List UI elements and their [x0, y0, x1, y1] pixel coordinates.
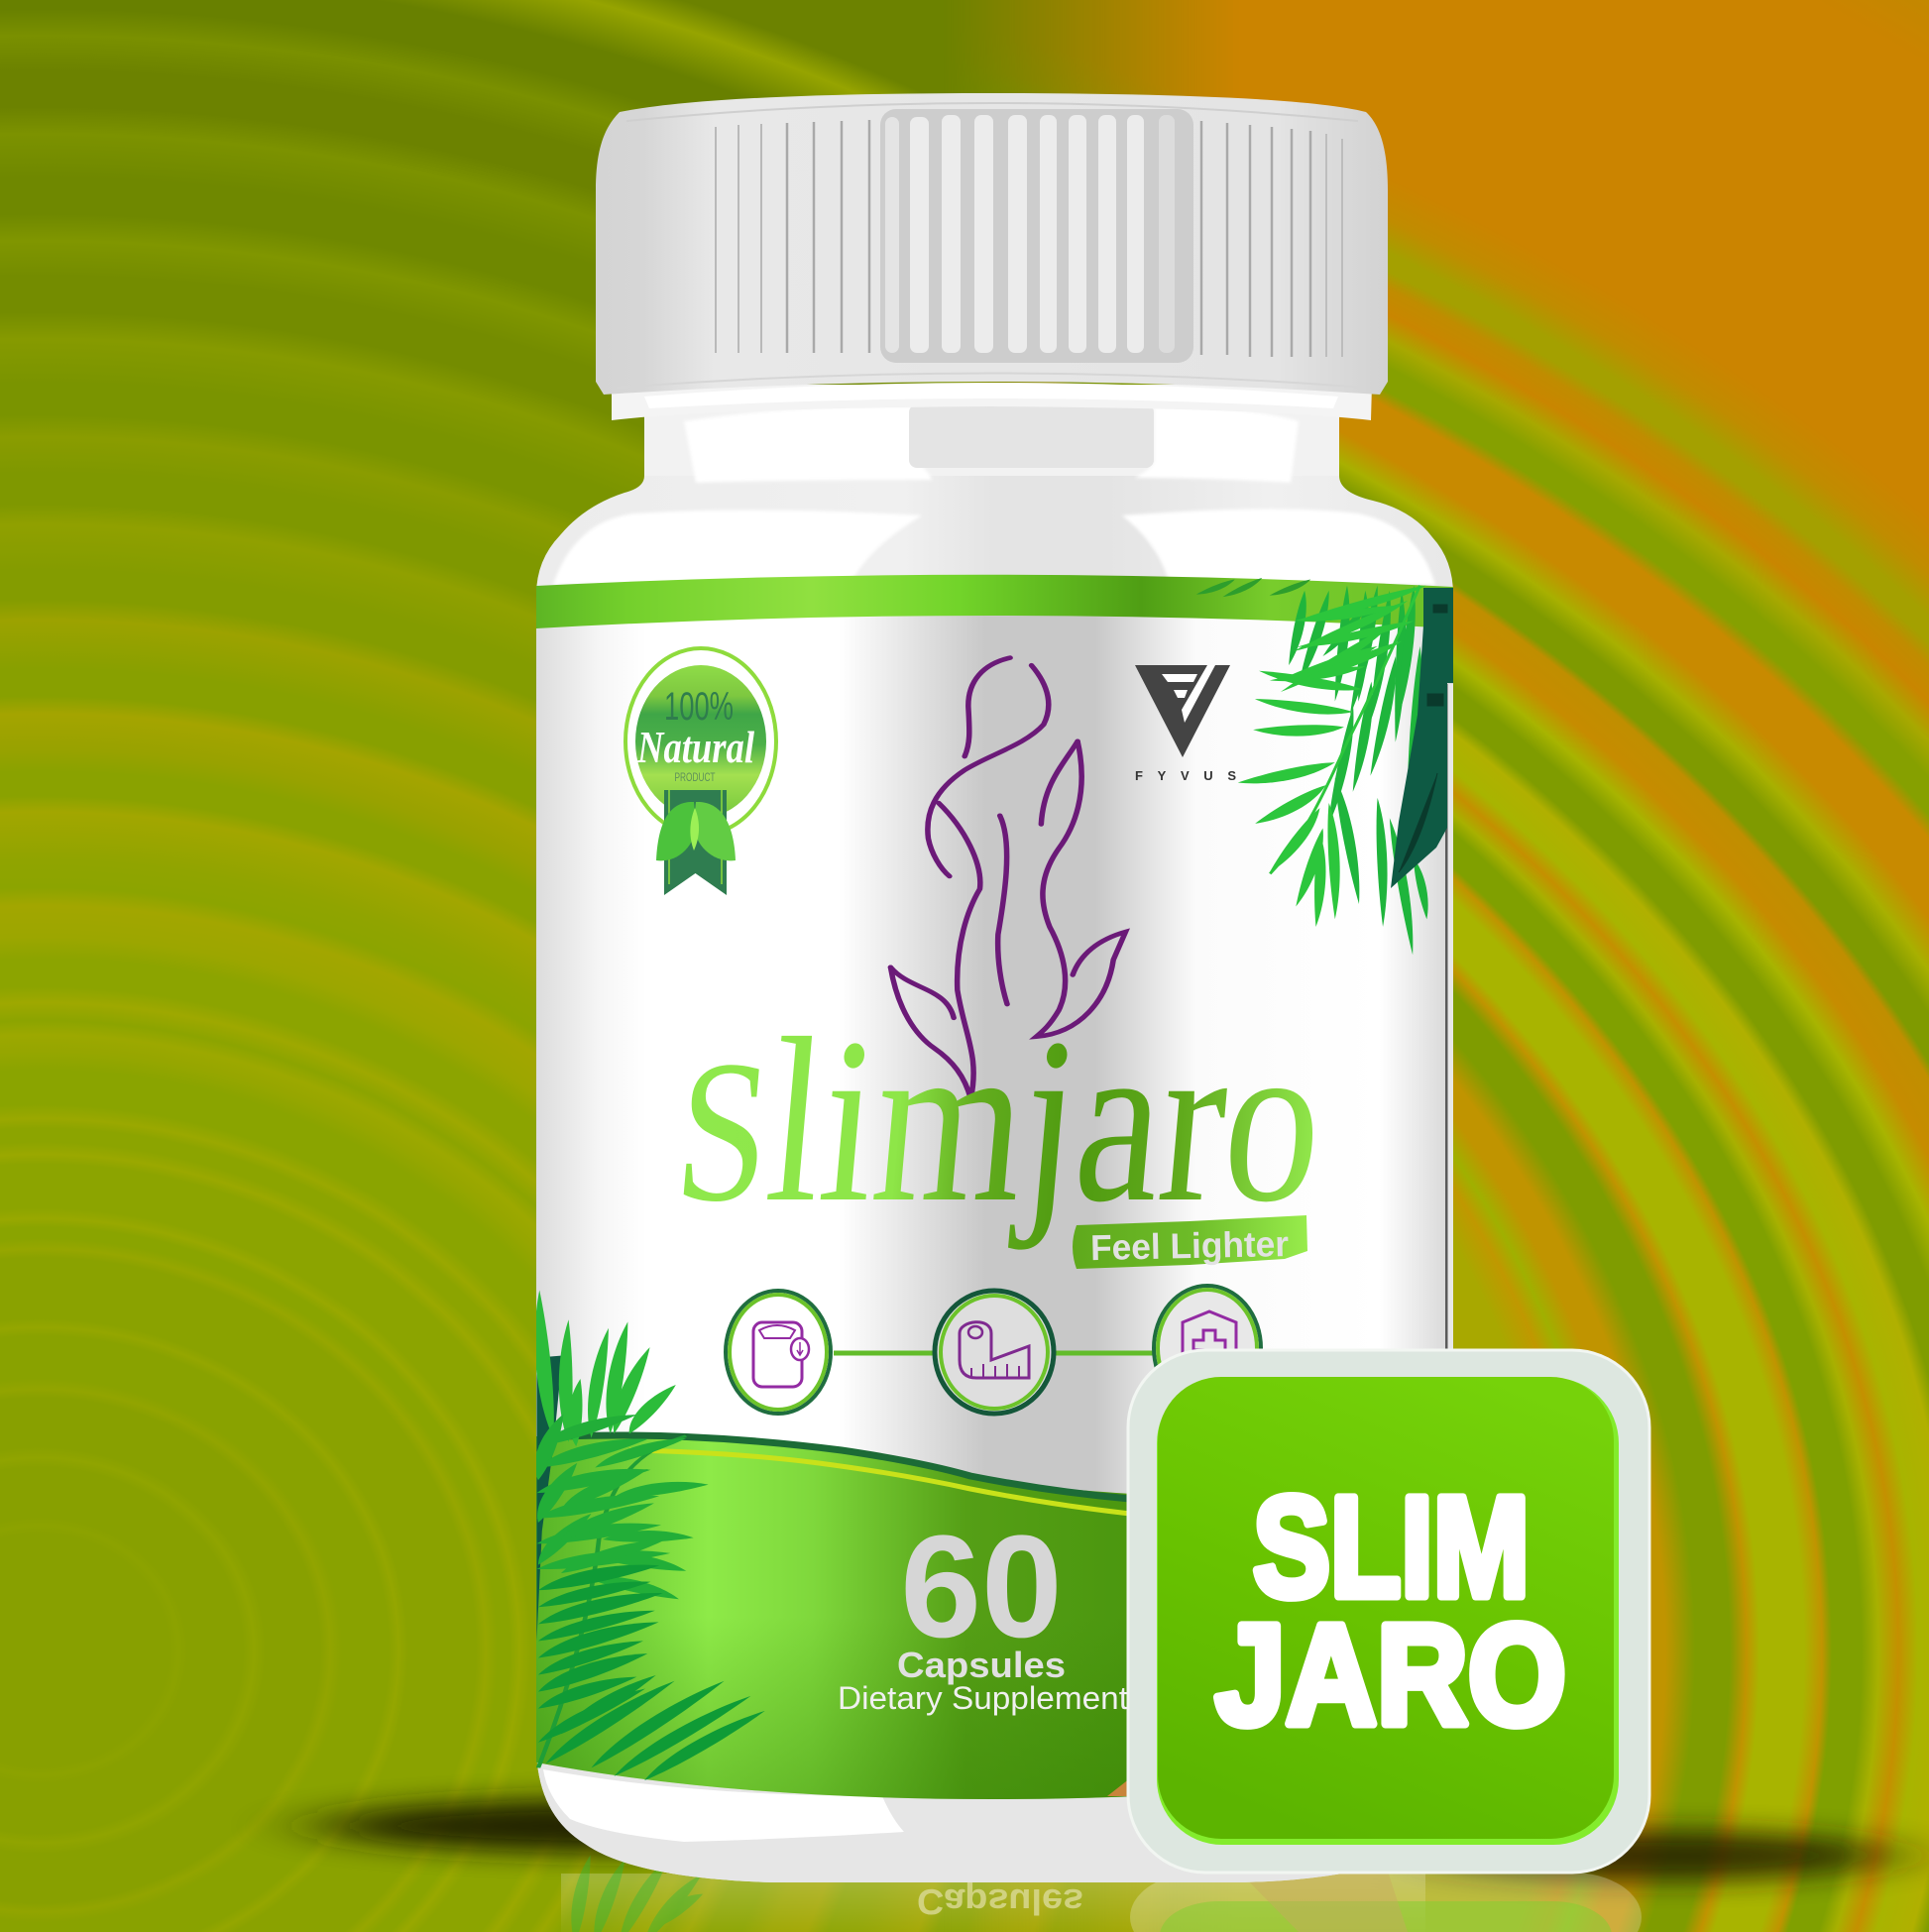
- icon: scale: [726, 1291, 831, 1414]
- capsule count block: [838, 1506, 1130, 1796]
- natural label: Natural: [636, 722, 754, 772]
- small fronds on the green band: [1196, 578, 1310, 597]
- reflection on the floor: [561, 1853, 1642, 1932]
- bottle: [536, 383, 1453, 1882]
- ground shadow left: [317, 1798, 971, 1854]
- natural product badge: [625, 648, 776, 895]
- bottle body silhouette: [536, 476, 1453, 1882]
- upper grass leaflets: [529, 1290, 680, 1446]
- hanging frond: [1286, 585, 1432, 956]
- lower bottle zone: [536, 1745, 1453, 1882]
- cap panel ribs: [885, 115, 1175, 353]
- tagline text: Feel Lighter: [1090, 1223, 1289, 1268]
- tile face: [1158, 1377, 1614, 1839]
- badge core: [635, 665, 766, 818]
- palm fronds bottom left: [526, 1290, 769, 1782]
- label white area: [536, 597, 1453, 1507]
- dark leaf top right: [1391, 588, 1453, 888]
- logo name: FYVUS: [1135, 768, 1236, 783]
- cap centre panel: [880, 109, 1193, 363]
- green band on lower label: [536, 1433, 1453, 1799]
- cap shell: [596, 93, 1388, 395]
- icon: health shield: [1154, 1286, 1261, 1411]
- collar: [612, 385, 1372, 420]
- tagline Feel Lighter: [1073, 1215, 1307, 1269]
- small orange corner: [1107, 1778, 1130, 1796]
- leaves on ribbon: [656, 802, 696, 860]
- count number: 60: [900, 1506, 1063, 1668]
- badge ring: [625, 648, 776, 835]
- ground shadow right: [1418, 1830, 1893, 1881]
- logo mark: [1135, 665, 1230, 757]
- brand name Slimjaro: Slimjaro: [667, 989, 1333, 1251]
- 100% label: 100%: [664, 685, 734, 729]
- benefit icons row: [726, 1286, 1261, 1414]
- top green band: [536, 575, 1453, 628]
- ribbon: [664, 790, 727, 895]
- brand logo FYVUS: [1135, 665, 1236, 783]
- bottle cap: [596, 93, 1388, 395]
- tile frame: [1128, 1350, 1649, 1873]
- background: ripple right side: [970, 0, 1929, 1932]
- main frond: [526, 1408, 710, 1767]
- reflected capsules text: Capsules: [917, 1881, 1083, 1922]
- bottle neck: [644, 406, 1339, 506]
- right edge line of label: [1445, 684, 1447, 1358]
- tagline brush stroke: [1073, 1215, 1307, 1269]
- product label: PRODUCT: [674, 770, 716, 784]
- main frond: [1237, 583, 1428, 927]
- lower highlight: [543, 1769, 904, 1842]
- connector lines: [834, 1350, 1153, 1356]
- palm fronds top right: [1195, 577, 1453, 956]
- tile text SLIM: SLIM: [1253, 1467, 1530, 1627]
- dark leaf bottom left: [536, 1355, 562, 1641]
- icon: measuring tape: [935, 1291, 1054, 1414]
- purple body outline: [890, 658, 1125, 1098]
- brand tile: [1128, 1350, 1649, 1873]
- tile face edge: [1157, 1378, 1619, 1845]
- dietary supplement label: Dietary Supplement: [838, 1680, 1128, 1716]
- tile text JARO: JARO: [1215, 1595, 1566, 1755]
- shoulder highlights: [553, 406, 1435, 585]
- neck centre panel: [909, 404, 1154, 468]
- capsules label: Capsules: [897, 1645, 1066, 1685]
- cap ribs left: [716, 120, 1342, 357]
- lower dense leaflets: [529, 1557, 769, 1782]
